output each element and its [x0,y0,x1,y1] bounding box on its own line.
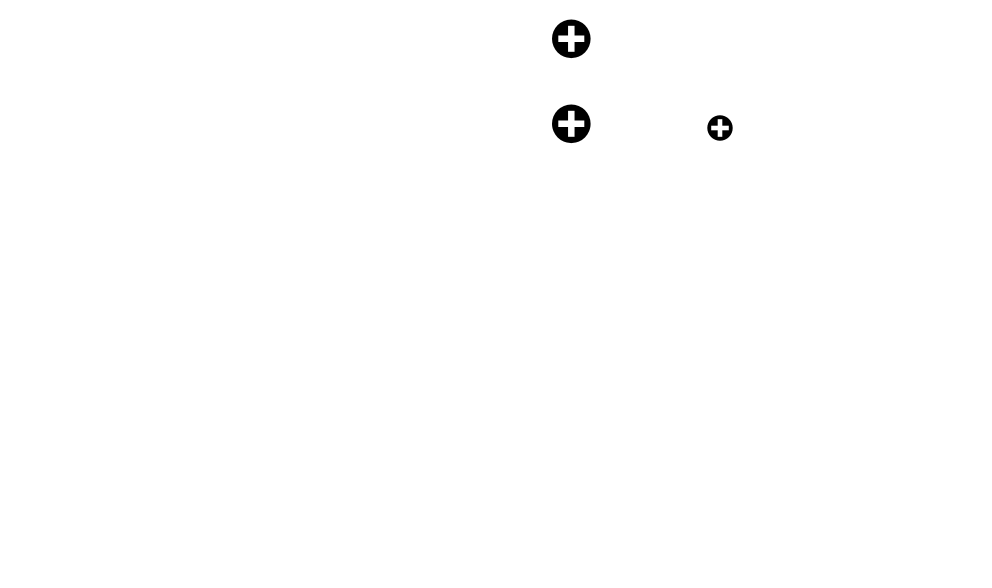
icon: small plus circle [707,115,733,141]
icon: large plus circle, top [552,20,591,58]
icon: large plus circle, middle [552,104,591,143]
